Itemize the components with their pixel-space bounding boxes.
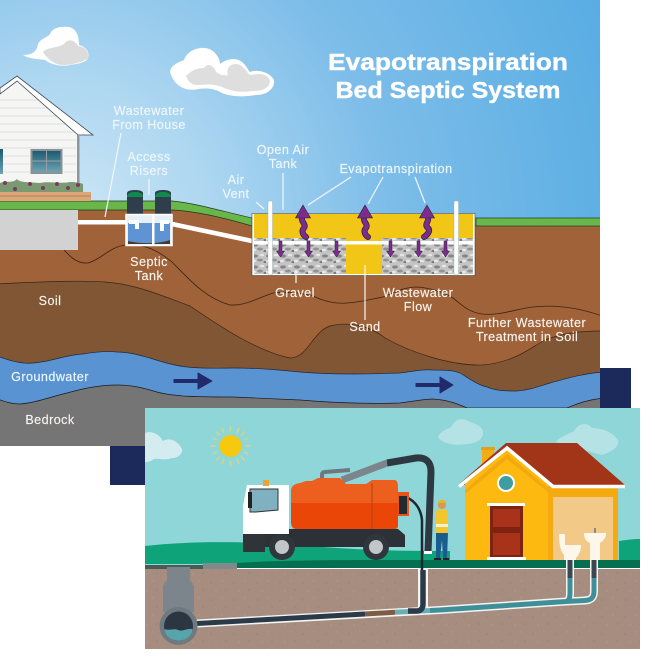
label: wastewater from house: From House	[112, 118, 186, 132]
label: further treatment: Treatment in Soil	[476, 330, 578, 344]
roof	[458, 443, 625, 485]
label: soil: Soil	[39, 294, 61, 308]
label: air vent: Air	[228, 173, 244, 187]
roof trim	[459, 448, 625, 486]
foundation	[0, 210, 78, 250]
shrubs	[0, 179, 83, 192]
icon: cloud	[438, 419, 483, 445]
label: groundwater: Groundwater	[11, 370, 89, 384]
garage wall	[548, 486, 618, 560]
chimney	[482, 448, 494, 464]
distribution pipe	[254, 241, 473, 244]
window	[30, 149, 62, 174]
label: further treatment: Further Wastewater	[468, 316, 586, 330]
icon: large cloud	[170, 48, 274, 96]
soil layers	[0, 205, 605, 455]
label: access risers: Risers	[130, 164, 168, 178]
icon: manhole	[160, 567, 198, 645]
arrow: groundwater flow left	[174, 373, 212, 389]
icon: cloud	[556, 424, 618, 455]
icon: sun	[210, 426, 250, 466]
front wall	[465, 450, 548, 560]
navy backing block	[110, 368, 631, 485]
label: wastewater flow	[382, 288, 453, 312]
roadway	[145, 563, 237, 569]
label: septic tank	[130, 256, 168, 280]
toilet	[559, 534, 581, 560]
round window	[498, 475, 514, 491]
pipe to bed	[172, 224, 252, 241]
icon: left cloud	[145, 432, 182, 462]
label: air vent	[222, 174, 249, 198]
label: gravel: Gravel	[275, 286, 315, 300]
label: sand: Sand	[349, 320, 381, 334]
sky	[0, 0, 600, 230]
icon: house	[458, 443, 625, 560]
hills	[145, 542, 450, 564]
icon: small cloud	[23, 27, 89, 66]
label: access risers: Access	[127, 150, 171, 164]
panel: septic truck illustration	[145, 408, 640, 649]
bedrock	[0, 384, 600, 446]
label: septic tank: Tank	[135, 269, 163, 283]
cab	[243, 485, 289, 534]
icon: house	[0, 76, 93, 250]
sink	[584, 533, 606, 560]
label: open air tank	[257, 144, 309, 168]
label: wastewater from house: Wastewater	[114, 104, 184, 118]
label: open air tank: Tank	[269, 157, 297, 171]
boom	[322, 470, 350, 480]
title: Evapotranspiration	[328, 49, 568, 75]
panel: evapotranspiration bed	[252, 201, 475, 276]
icon: worker	[434, 500, 449, 560]
label: evapotranspiration: Evapotranspiration	[339, 162, 453, 176]
upper soil contour	[60, 245, 605, 317]
title: Bed Septic System	[336, 77, 560, 103]
panel: evapotranspiration diagram	[0, 0, 606, 455]
label: bedrock: Bedrock	[25, 413, 75, 427]
sky	[145, 408, 640, 568]
gravel	[254, 238, 346, 274]
sand	[346, 238, 382, 274]
air vents	[268, 201, 272, 275]
chassis	[265, 529, 405, 547]
pipes	[197, 560, 594, 624]
soil	[145, 569, 640, 649]
ground grass	[0, 201, 252, 226]
label: wastewater flow: Wastewater	[383, 286, 453, 300]
label: septic tank: Septic	[130, 255, 168, 269]
label: access risers	[127, 152, 170, 176]
label: wastewater from house	[113, 106, 185, 130]
title	[328, 49, 568, 103]
groundwater	[0, 351, 600, 408]
icon: septic tank	[126, 190, 172, 246]
label: air vent: Vent	[222, 187, 250, 201]
icon: vacuum truck	[243, 458, 432, 570]
leader lines	[105, 133, 425, 320]
house outlet pipe	[78, 220, 128, 224]
label: open air tank: Open Air	[257, 143, 309, 157]
arrow: groundwater flow right	[416, 377, 453, 393]
dark soil layer	[0, 280, 600, 390]
wastewater flow arrows	[276, 241, 450, 257]
label: wastewater flow: Flow	[404, 300, 433, 314]
wheels	[269, 534, 295, 560]
dark green strip	[237, 560, 640, 568]
label: further treatment	[468, 317, 586, 342]
door	[487, 503, 525, 506]
deck	[0, 192, 91, 201]
evapotranspiration arrows	[296, 205, 434, 237]
hose	[387, 458, 431, 552]
tank	[291, 478, 398, 529]
